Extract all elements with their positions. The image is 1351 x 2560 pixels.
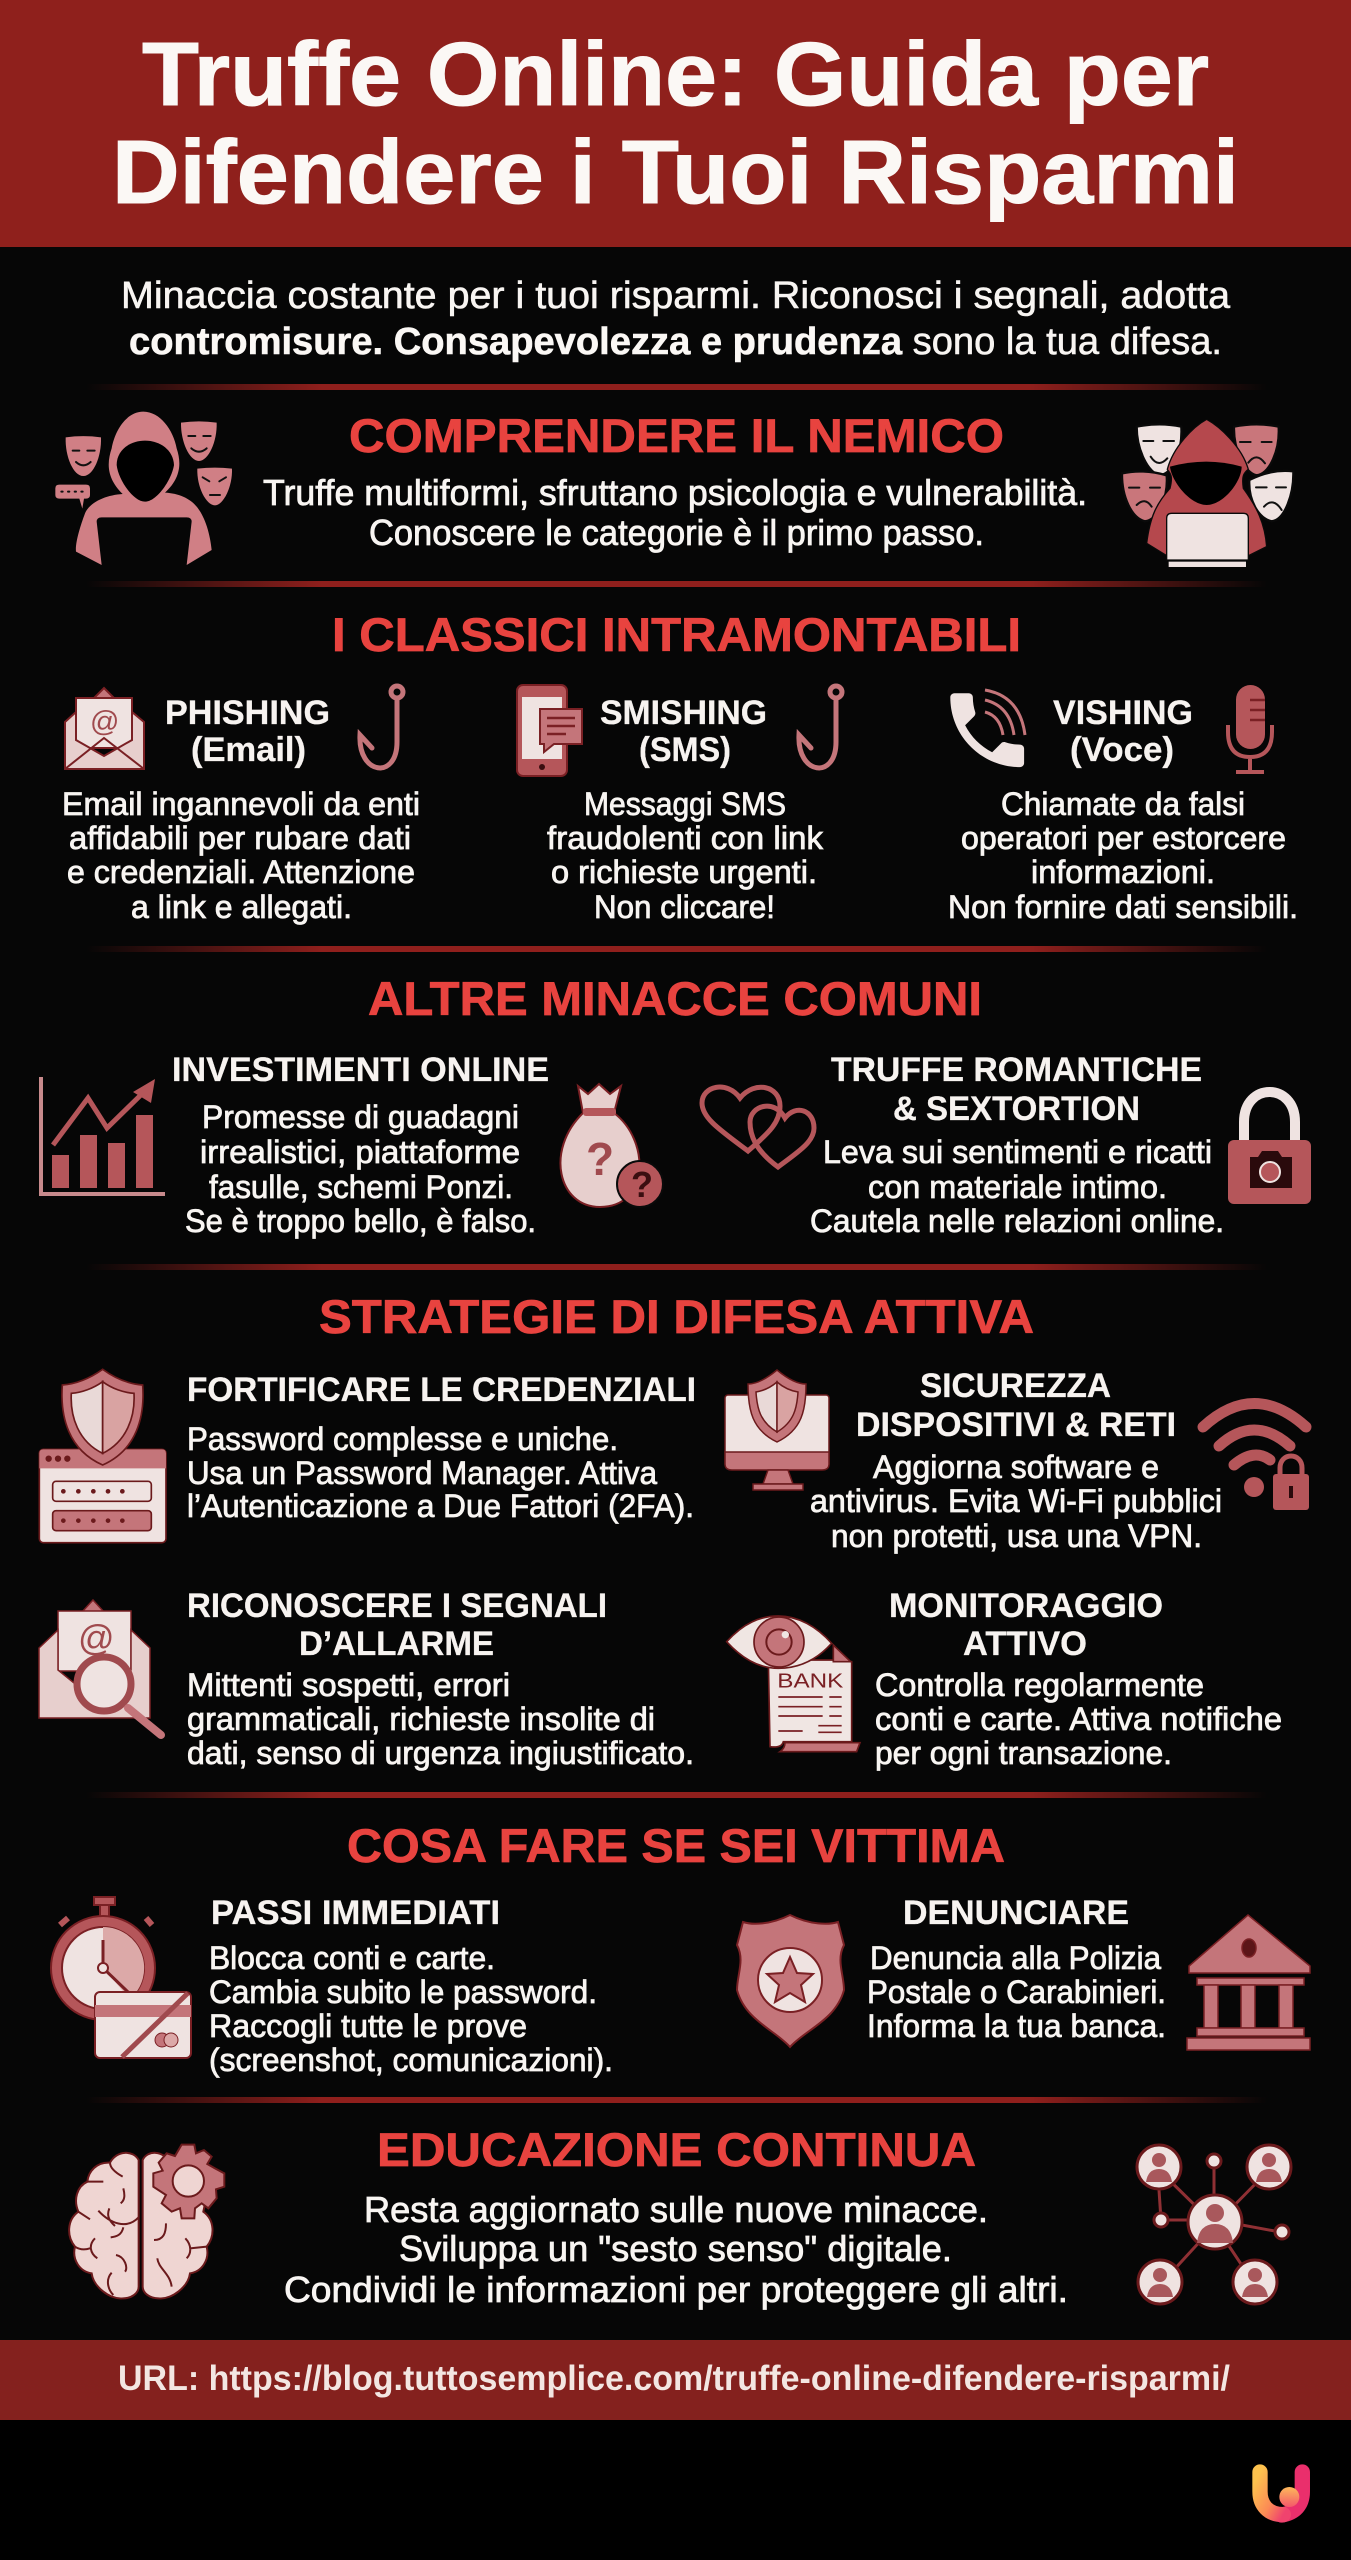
- icon: brain with gear: [69, 2145, 224, 2298]
- phishing text: a link e allegati.: [131, 889, 352, 925]
- icon: smartphone with chat bubble: [517, 685, 582, 776]
- smishing title: [600, 694, 767, 769]
- denunciare title: DENUNCIARE: [903, 1894, 1129, 1932]
- riconoscere text: grammaticali, richieste insolite di: [187, 1701, 655, 1737]
- icon: email envelope: [65, 688, 144, 769]
- vishing text: [948, 786, 1298, 925]
- fortificare text: Usa un Password Manager. Attiva: [187, 1455, 657, 1491]
- icon: eye over bank statement: BANK: [777, 1669, 844, 1692]
- fortificare title: FORTIFICARE LE CREDENZIALI: [187, 1371, 696, 1409]
- icon: padlock with camera: [1228, 1092, 1311, 1204]
- icon: hacker at laptop with theatre masks: [1122, 419, 1293, 567]
- icon: shield and password window: [39, 1369, 166, 1543]
- title: Difendere i Tuoi Risparmi: [112, 123, 1239, 223]
- passi immediati text: Blocca conti e carte.: [209, 1940, 495, 1976]
- vishing title: [1053, 694, 1193, 769]
- monitoraggio text: Controlla regolarmente: [875, 1667, 1204, 1703]
- smishing title: (SMS): [639, 731, 731, 769]
- card: monitoraggio attivo: [727, 1587, 1282, 1771]
- romantiche text: [810, 1134, 1224, 1239]
- card: riconoscere i segnali: [39, 1587, 694, 1771]
- intro text: contromisure. Consapevolezza e prudenza sono la tua difesa.: [129, 321, 1222, 363]
- card: investimenti online: [41, 1051, 663, 1239]
- icon: money bag with question mark: ?: [631, 1164, 653, 1205]
- riconoscere title: RICONOSCERE I SEGNALI: [187, 1587, 607, 1625]
- header banner: [0, 0, 1351, 247]
- romantiche title: TRUFFE ROMANTICHE: [831, 1051, 1202, 1089]
- icon: phone handset with signal: [950, 690, 1025, 767]
- icon: fish hook: [360, 686, 403, 768]
- romantiche title: [831, 1051, 1202, 1128]
- icon: envelope with magnifying glass: [39, 1600, 161, 1735]
- heading: STRATEGIE DI DIFESA ATTIVA: [319, 1290, 1034, 1343]
- monitoraggio title: MONITORAGGIO: [889, 1587, 1163, 1625]
- investimenti text: [185, 1099, 536, 1239]
- fortificare text: l’Autenticazione a Due Fattori (2FA).: [187, 1488, 694, 1524]
- phishing text: affidabili per rubare dati: [69, 820, 411, 856]
- icon: monitor with shield: [725, 1370, 829, 1490]
- phishing title: [165, 694, 330, 769]
- card: fortificare le credenziali: [39, 1369, 696, 1543]
- icon: rising bar chart: [41, 1077, 165, 1194]
- denunciare text: Informa la tua banca.: [867, 2008, 1166, 2044]
- denunciare text: [867, 1940, 1166, 2044]
- smishing text: Non cliccare!: [594, 889, 775, 925]
- icon: microphone: [1228, 685, 1272, 772]
- icon: eye over bank statement: [727, 1616, 860, 1752]
- vishing text: informazioni.: [1031, 854, 1215, 890]
- card: smishing: [517, 685, 842, 925]
- text block: Resta aggiornato sulle nuove minacce.: [364, 2189, 988, 2230]
- romantiche text: Cautela nelle relazioni online.: [810, 1203, 1224, 1239]
- phishing text: e credenziali. Attenzione: [67, 854, 415, 890]
- logo: [1260, 2472, 1302, 2515]
- smishing text: fraudolenti con link: [547, 820, 824, 856]
- heading: EDUCAZIONE CONTINUA: [377, 2123, 976, 2176]
- fortificare text: Password complesse e uniche.: [187, 1421, 618, 1457]
- denunciare text: Postale o Carabinieri.: [867, 1974, 1166, 2010]
- footer url bar: [0, 2340, 1351, 2420]
- icon: police badge: [737, 1915, 844, 2047]
- passi immediati text: Raccogli tutte le prove: [209, 2008, 527, 2044]
- monitoraggio text: [875, 1667, 1282, 1771]
- investimenti text: irrealistici, piattaforme: [200, 1134, 520, 1170]
- footer url bar: URL: https://blog.tuttosemplice.com/truffe-online-difendere-risparmi/: [118, 2359, 1230, 2398]
- passi immediati text: (screenshot, comunicazioni).: [209, 2042, 613, 2078]
- fortificare text: [187, 1421, 694, 1524]
- smishing text: Messaggi SMS: [584, 786, 786, 822]
- heading: ALTRE MINACCE COMUNI: [368, 972, 982, 1025]
- investimenti text: fasulle, schemi Ponzi.: [209, 1169, 513, 1205]
- phishing title: PHISHING: [165, 694, 330, 732]
- text block: Truffe multiformi, sfruttano psicologia e vulnerabilità.: [263, 472, 1087, 513]
- romantiche title: & SEXTORTION: [893, 1090, 1140, 1128]
- smishing text: o richieste urgenti.: [551, 854, 817, 890]
- panel: educazione continua: [69, 2123, 1291, 2310]
- title: Truffe Online: Guida per: [142, 25, 1209, 125]
- icon: fish hook: [799, 686, 842, 768]
- sicurezza title: [856, 1367, 1176, 1444]
- romantiche text: con materiale intimo.: [868, 1169, 1167, 1205]
- riconoscere text: Mittenti sospetti, errori: [187, 1667, 510, 1703]
- monitoraggio title: [889, 1587, 1163, 1663]
- text block: [263, 472, 1087, 553]
- vishing title: VISHING: [1053, 694, 1193, 732]
- heading: I CLASSICI INTRAMONTABILI: [332, 608, 1021, 661]
- monitoraggio title: ATTIVO: [963, 1625, 1087, 1663]
- icon: wifi with padlock: [1203, 1404, 1309, 1510]
- icon: people network: [1137, 2145, 1291, 2304]
- phishing title: (Email): [191, 731, 306, 769]
- card: sicurezza dispositivi e reti: [725, 1367, 1309, 1554]
- smishing title: SMISHING: [600, 694, 767, 732]
- heading: COMPRENDERE IL NEMICO: [349, 409, 1004, 462]
- icon: envelope with magnifying glass: @: [78, 1617, 115, 1658]
- passi immediati title: PASSI IMMEDIATI: [211, 1894, 500, 1932]
- investimenti text: Se è troppo bello, è falso.: [185, 1203, 536, 1239]
- passi immediati text: Cambia subito le password.: [209, 1974, 597, 2010]
- riconoscere title: D’ALLARME: [299, 1625, 494, 1663]
- vishing text: Non fornire dati sensibili.: [948, 889, 1298, 925]
- intro text: Minaccia costante per i tuoi risparmi. Riconosci i segnali, adotta: [121, 275, 1231, 317]
- sicurezza text: Aggiorna software e: [873, 1449, 1159, 1485]
- phishing text: Email ingannevoli da enti: [62, 786, 420, 822]
- vishing text: Chiamate da falsi: [1001, 786, 1245, 822]
- vishing text: operatori per estorcere: [961, 820, 1286, 856]
- panel: cosa fare se sei vittima: [51, 1819, 1310, 2078]
- riconoscere text: [187, 1667, 694, 1771]
- icon: email envelope: @: [90, 706, 119, 738]
- text block: Conoscere le categorie è il primo passo.: [369, 512, 984, 553]
- investimenti text: Promesse di guadagni: [202, 1099, 519, 1135]
- heading: COSA FARE SE SEI VITTIMA: [347, 1819, 1005, 1872]
- sicurezza title: DISPOSITIVI & RETI: [856, 1406, 1176, 1444]
- icon: stopwatch and blocked card: [51, 1897, 191, 2058]
- icon: hooded hacker with masks: [55, 412, 232, 565]
- sicurezza text: [810, 1449, 1222, 1554]
- icon: money bag with question mark: [560, 1084, 663, 1207]
- investimenti title: INVESTIMENTI ONLINE: [172, 1051, 549, 1089]
- smishing text: [547, 786, 824, 925]
- sicurezza title: SICUREZZA: [920, 1367, 1111, 1405]
- text block: Sviluppa un "sesto senso" digitale.: [399, 2228, 952, 2269]
- card: passi immediati: [51, 1894, 613, 2078]
- card: vishing: [948, 685, 1298, 925]
- text block: [284, 2189, 1068, 2310]
- icon: two hearts: [702, 1087, 814, 1167]
- panel: altre minacce comuni: [41, 972, 1311, 1239]
- romantiche text: Leva sui sentimenti e ricatti: [823, 1134, 1212, 1170]
- icon: bank building: [1187, 1915, 1310, 2050]
- denunciare text: Denuncia alla Polizia: [870, 1940, 1161, 1976]
- monitoraggio text: per ogni transazione.: [875, 1735, 1172, 1771]
- panel: comprendere il nemico: [55, 409, 1293, 567]
- riconoscere text: dati, senso di urgenza ingiustificato.: [187, 1735, 694, 1771]
- riconoscere title: [187, 1587, 607, 1663]
- vishing title: (Voce): [1070, 731, 1174, 769]
- card: phishing: [62, 686, 420, 925]
- title: [112, 25, 1239, 223]
- monitoraggio text: conti e carte. Attiva notifiche: [875, 1701, 1282, 1737]
- sicurezza text: antivirus. Evita Wi-Fi pubblici: [810, 1483, 1222, 1519]
- phishing text: [62, 786, 420, 925]
- text block: Condividi le informazioni per proteggere gli altri.: [284, 2269, 1068, 2310]
- icon: money bag with question mark: ?: [586, 1133, 614, 1185]
- intro text: [121, 275, 1231, 363]
- card: denunciare: [737, 1894, 1310, 2050]
- sicurezza text: non protetti, usa una VPN.: [831, 1518, 1202, 1554]
- card: truffe romantiche: [702, 1051, 1311, 1239]
- passi immediati text: [209, 1940, 613, 2078]
- panel: i classici intramontabili: [62, 608, 1298, 925]
- panel: strategie di difesa attiva: [39, 1290, 1309, 1771]
